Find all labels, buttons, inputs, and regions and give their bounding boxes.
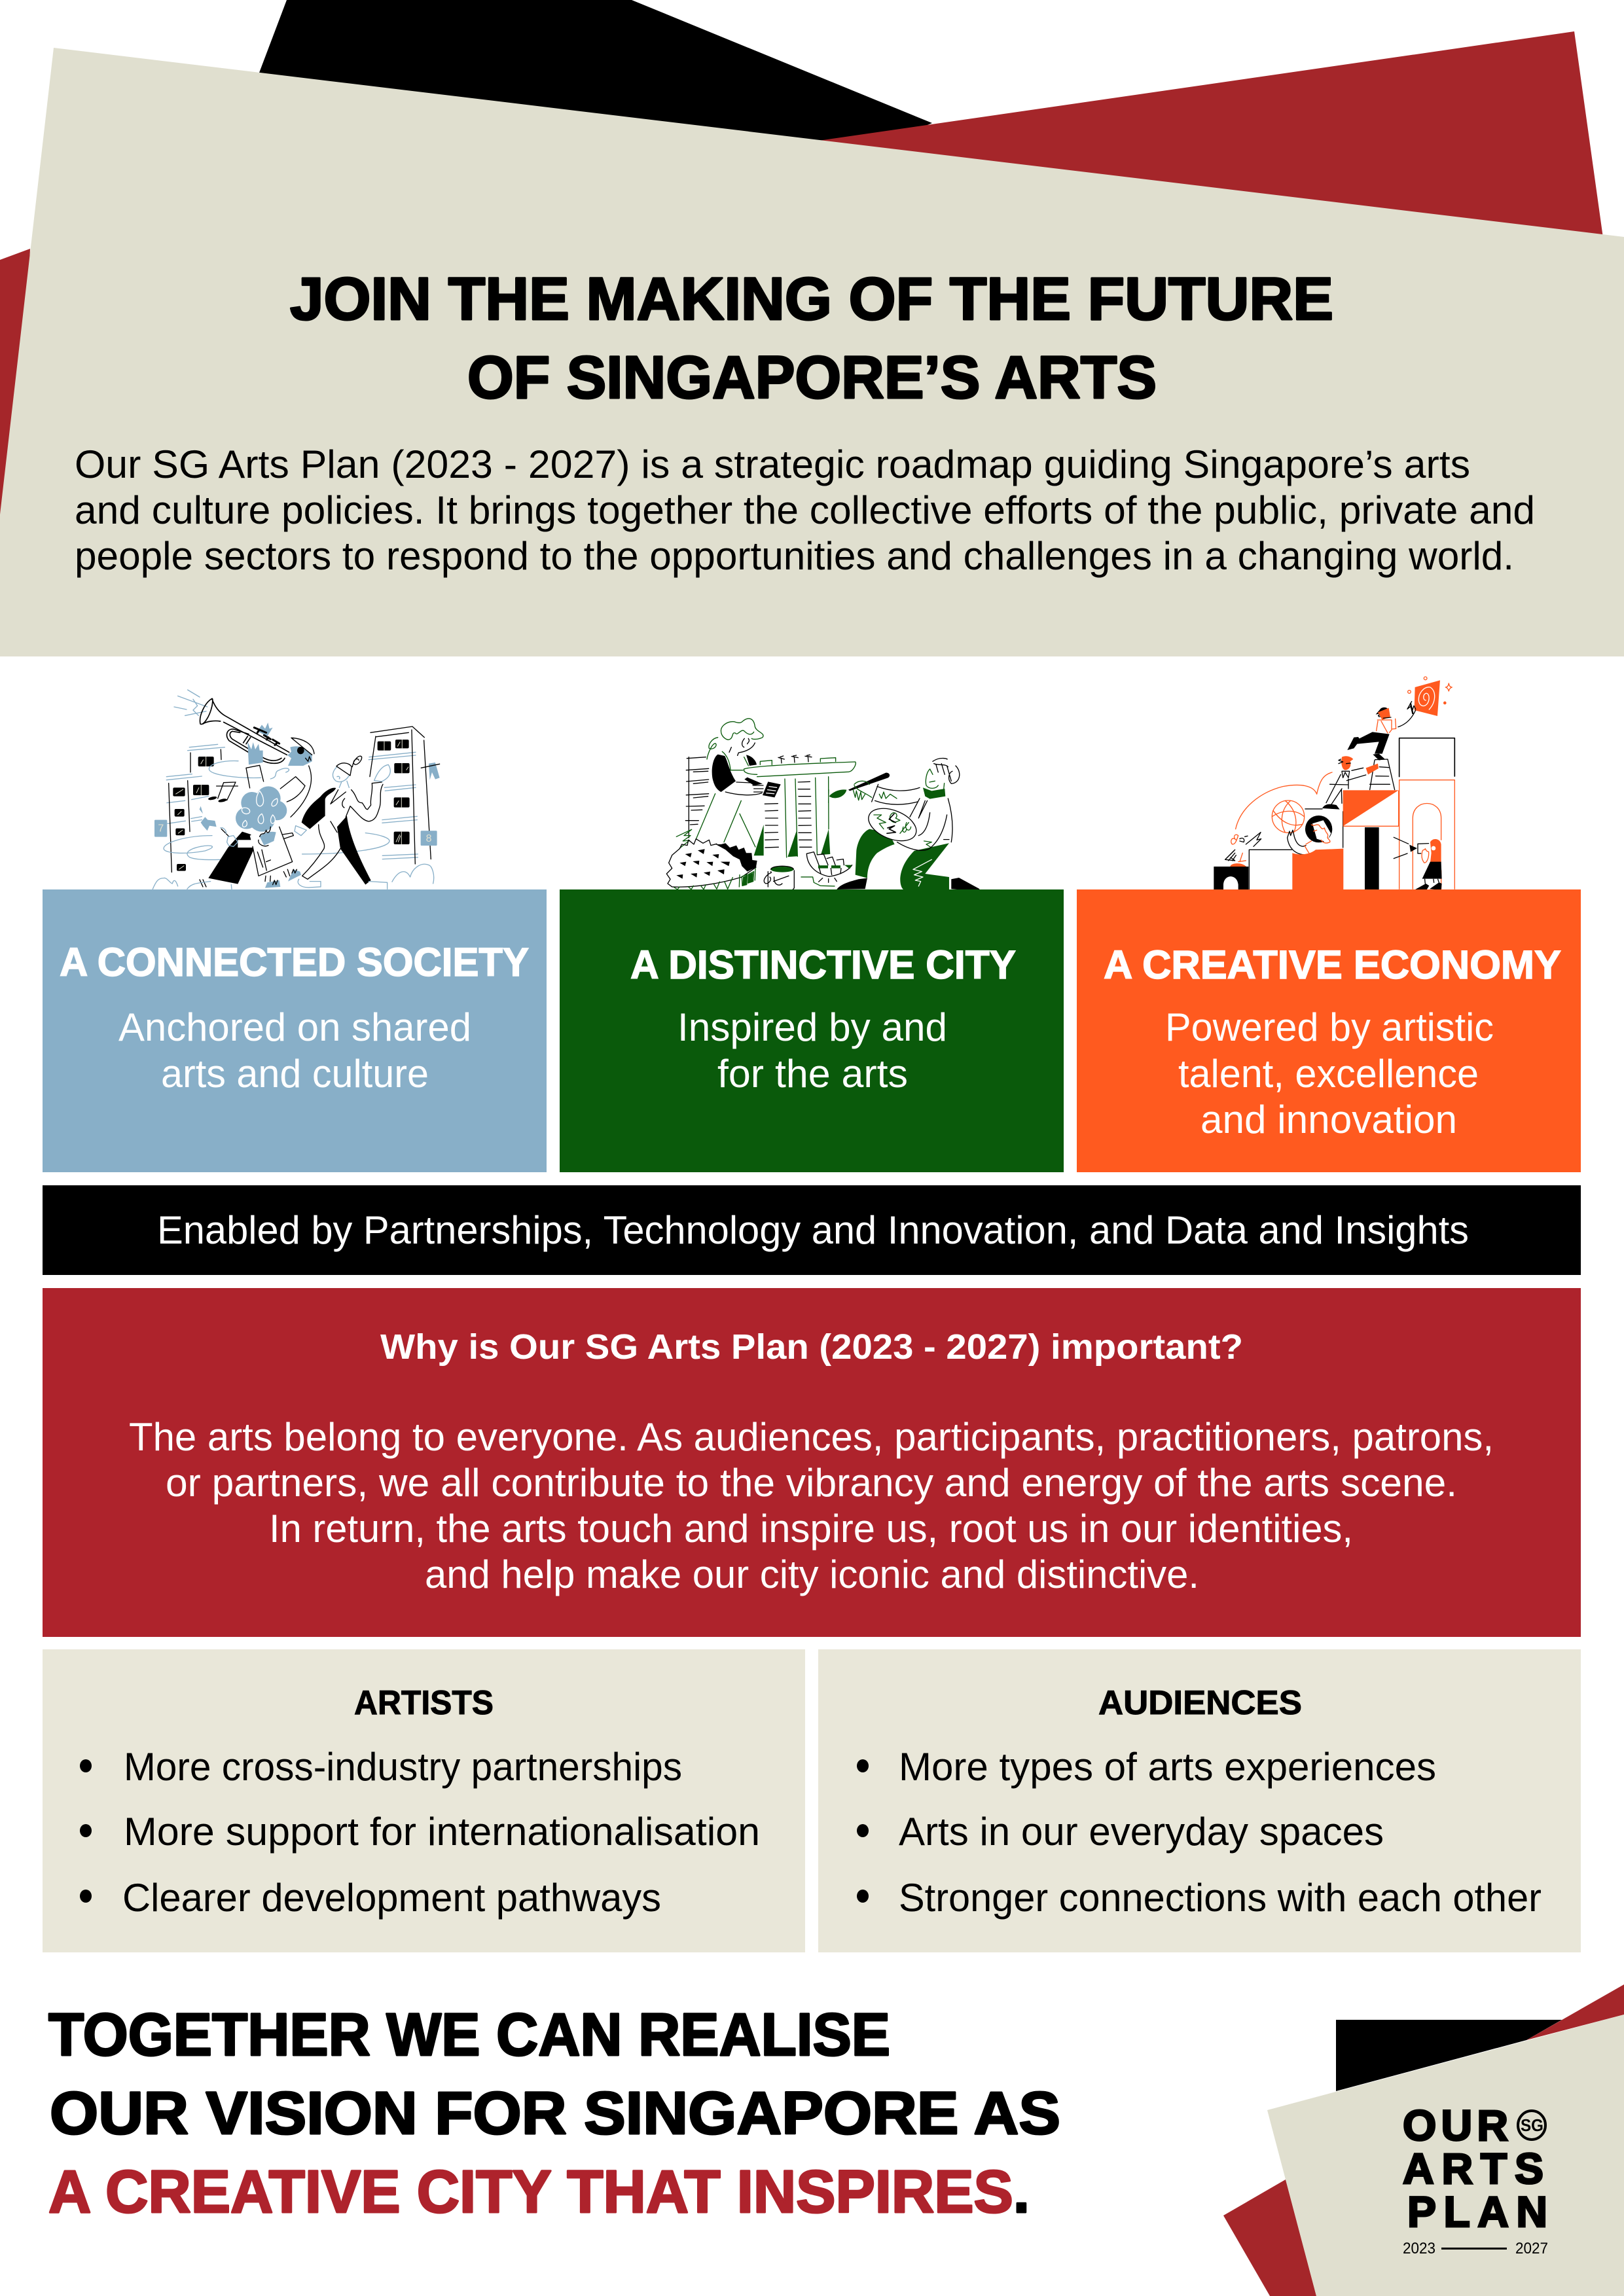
panel: a creative economy: and innovation — [1200, 1098, 1457, 1141]
intro text block: Our SG Arts Plan (2023 - 2027) is a strategic roadmap guiding Singapore’s arts — [75, 442, 1470, 486]
intro text block — [75, 442, 1535, 578]
title: JOIN THE MAKING OF THE FUTURE — [290, 266, 1333, 332]
panel: why the plan is important: Why is Our SG Arts Plan (2023 - 2027) important? — [380, 1327, 1243, 1367]
panel: a creative economy: talent, excellence — [1178, 1052, 1479, 1096]
panel: why the plan is important: and help make our city iconic and distinctive. — [425, 1552, 1199, 1596]
closing statement: TOGETHER WE CAN REALISE — [48, 2001, 890, 2068]
black bar: enablers: Enabled by Partnerships, Technology and Innovation, and Data and Insights — [157, 1208, 1469, 1252]
closing statement — [48, 2001, 1060, 2225]
illustration: connected society, trumpeter and woman among flats: 7 — [158, 823, 164, 834]
panel: why the plan is important — [43, 1288, 1581, 1637]
panel: audiences: Stronger connections with each other — [899, 1876, 1542, 1920]
header background shapes — [0, 0, 1624, 656]
panel: a distinctive city: Inspired by and — [677, 1005, 947, 1049]
logo: Our SG Arts Plan 2023-2027: ARTS — [1403, 2144, 1543, 2193]
illustration: connected society, trumpeter and woman among flats: 8 — [426, 833, 432, 844]
footer logo shapes — [1223, 1984, 1624, 2296]
intro text block: people sectors to respond to the opportunities and challenges in a changing world. — [75, 534, 1514, 578]
panel: a connected society: A CONNECTED SOCIETY — [60, 940, 529, 984]
logo: Our SG Arts Plan 2023-2027: PLAN — [1407, 2187, 1547, 2236]
panel: audiences: Arts in our everyday spaces — [899, 1810, 1384, 1854]
panel: audiences: More types of arts experiences — [899, 1745, 1436, 1789]
logo: Our SG Arts Plan 2023-2027: 2027 — [1515, 2240, 1548, 2257]
panel: audiences — [818, 1649, 1581, 1952]
panel: a creative economy: Powered by artistic — [1165, 1005, 1494, 1049]
panel: a connected society: Anchored on shared — [118, 1005, 471, 1049]
panel: a connected society — [43, 889, 547, 1172]
panel: why the plan is important: The arts belong to everyone. As audiences, participants, practitioners, patrons, — [129, 1415, 1494, 1459]
panel: a distinctive city: A DISTINCTIVE CITY — [630, 942, 1016, 987]
panel: why the plan is important: In return, the arts touch and inspire us, root us in our identities, — [269, 1507, 1353, 1551]
black bar: enablers — [43, 1185, 1581, 1275]
closing statement: A CREATIVE CITY THAT INSPIRES. — [48, 2159, 1030, 2225]
title — [290, 266, 1333, 411]
panel: artists — [43, 1649, 805, 1952]
panel: a creative economy: A CREATIVE ECONOMY — [1104, 942, 1561, 987]
panel: artists: Clearer development pathways — [122, 1876, 661, 1920]
panel: why the plan is important: or partners, we all contribute to the vibrancy and energy of the arts scene. — [166, 1461, 1457, 1505]
illustration: distinctive city, Marina Bay Sands and painter — [666, 719, 980, 893]
title: OF SINGAPORE’S ARTS — [467, 344, 1157, 411]
panel: a distinctive city: for the arts — [717, 1052, 908, 1096]
illustration: creative economy, builders on blocks — [1214, 677, 1454, 892]
panel: artists: More support for internationalisation — [124, 1810, 760, 1854]
panel: audiences: AUDIENCES — [1098, 1684, 1302, 1722]
panel: a creative economy — [1077, 889, 1581, 1172]
closing statement: OUR VISION FOR SINGAPORE AS — [50, 2080, 1060, 2147]
illustration: connected society, trumpeter and woman among flats — [153, 690, 440, 889]
logo: Our SG Arts Plan 2023-2027 — [1403, 2101, 1548, 2257]
panel: a distinctive city — [560, 889, 1064, 1172]
panel: artists: ARTISTS — [354, 1684, 494, 1722]
panel: a connected society: arts and culture — [161, 1052, 429, 1096]
intro text block: and culture policies. It brings together the collective efforts of the public, private and — [75, 488, 1535, 532]
logo: Our SG Arts Plan 2023-2027: OUR — [1403, 2101, 1508, 2149]
panel: artists: More cross-industry partnerships — [124, 1745, 682, 1789]
logo: Our SG Arts Plan 2023-2027: SG — [1521, 2115, 1543, 2135]
logo: Our SG Arts Plan 2023-2027: 2023 — [1403, 2240, 1435, 2257]
